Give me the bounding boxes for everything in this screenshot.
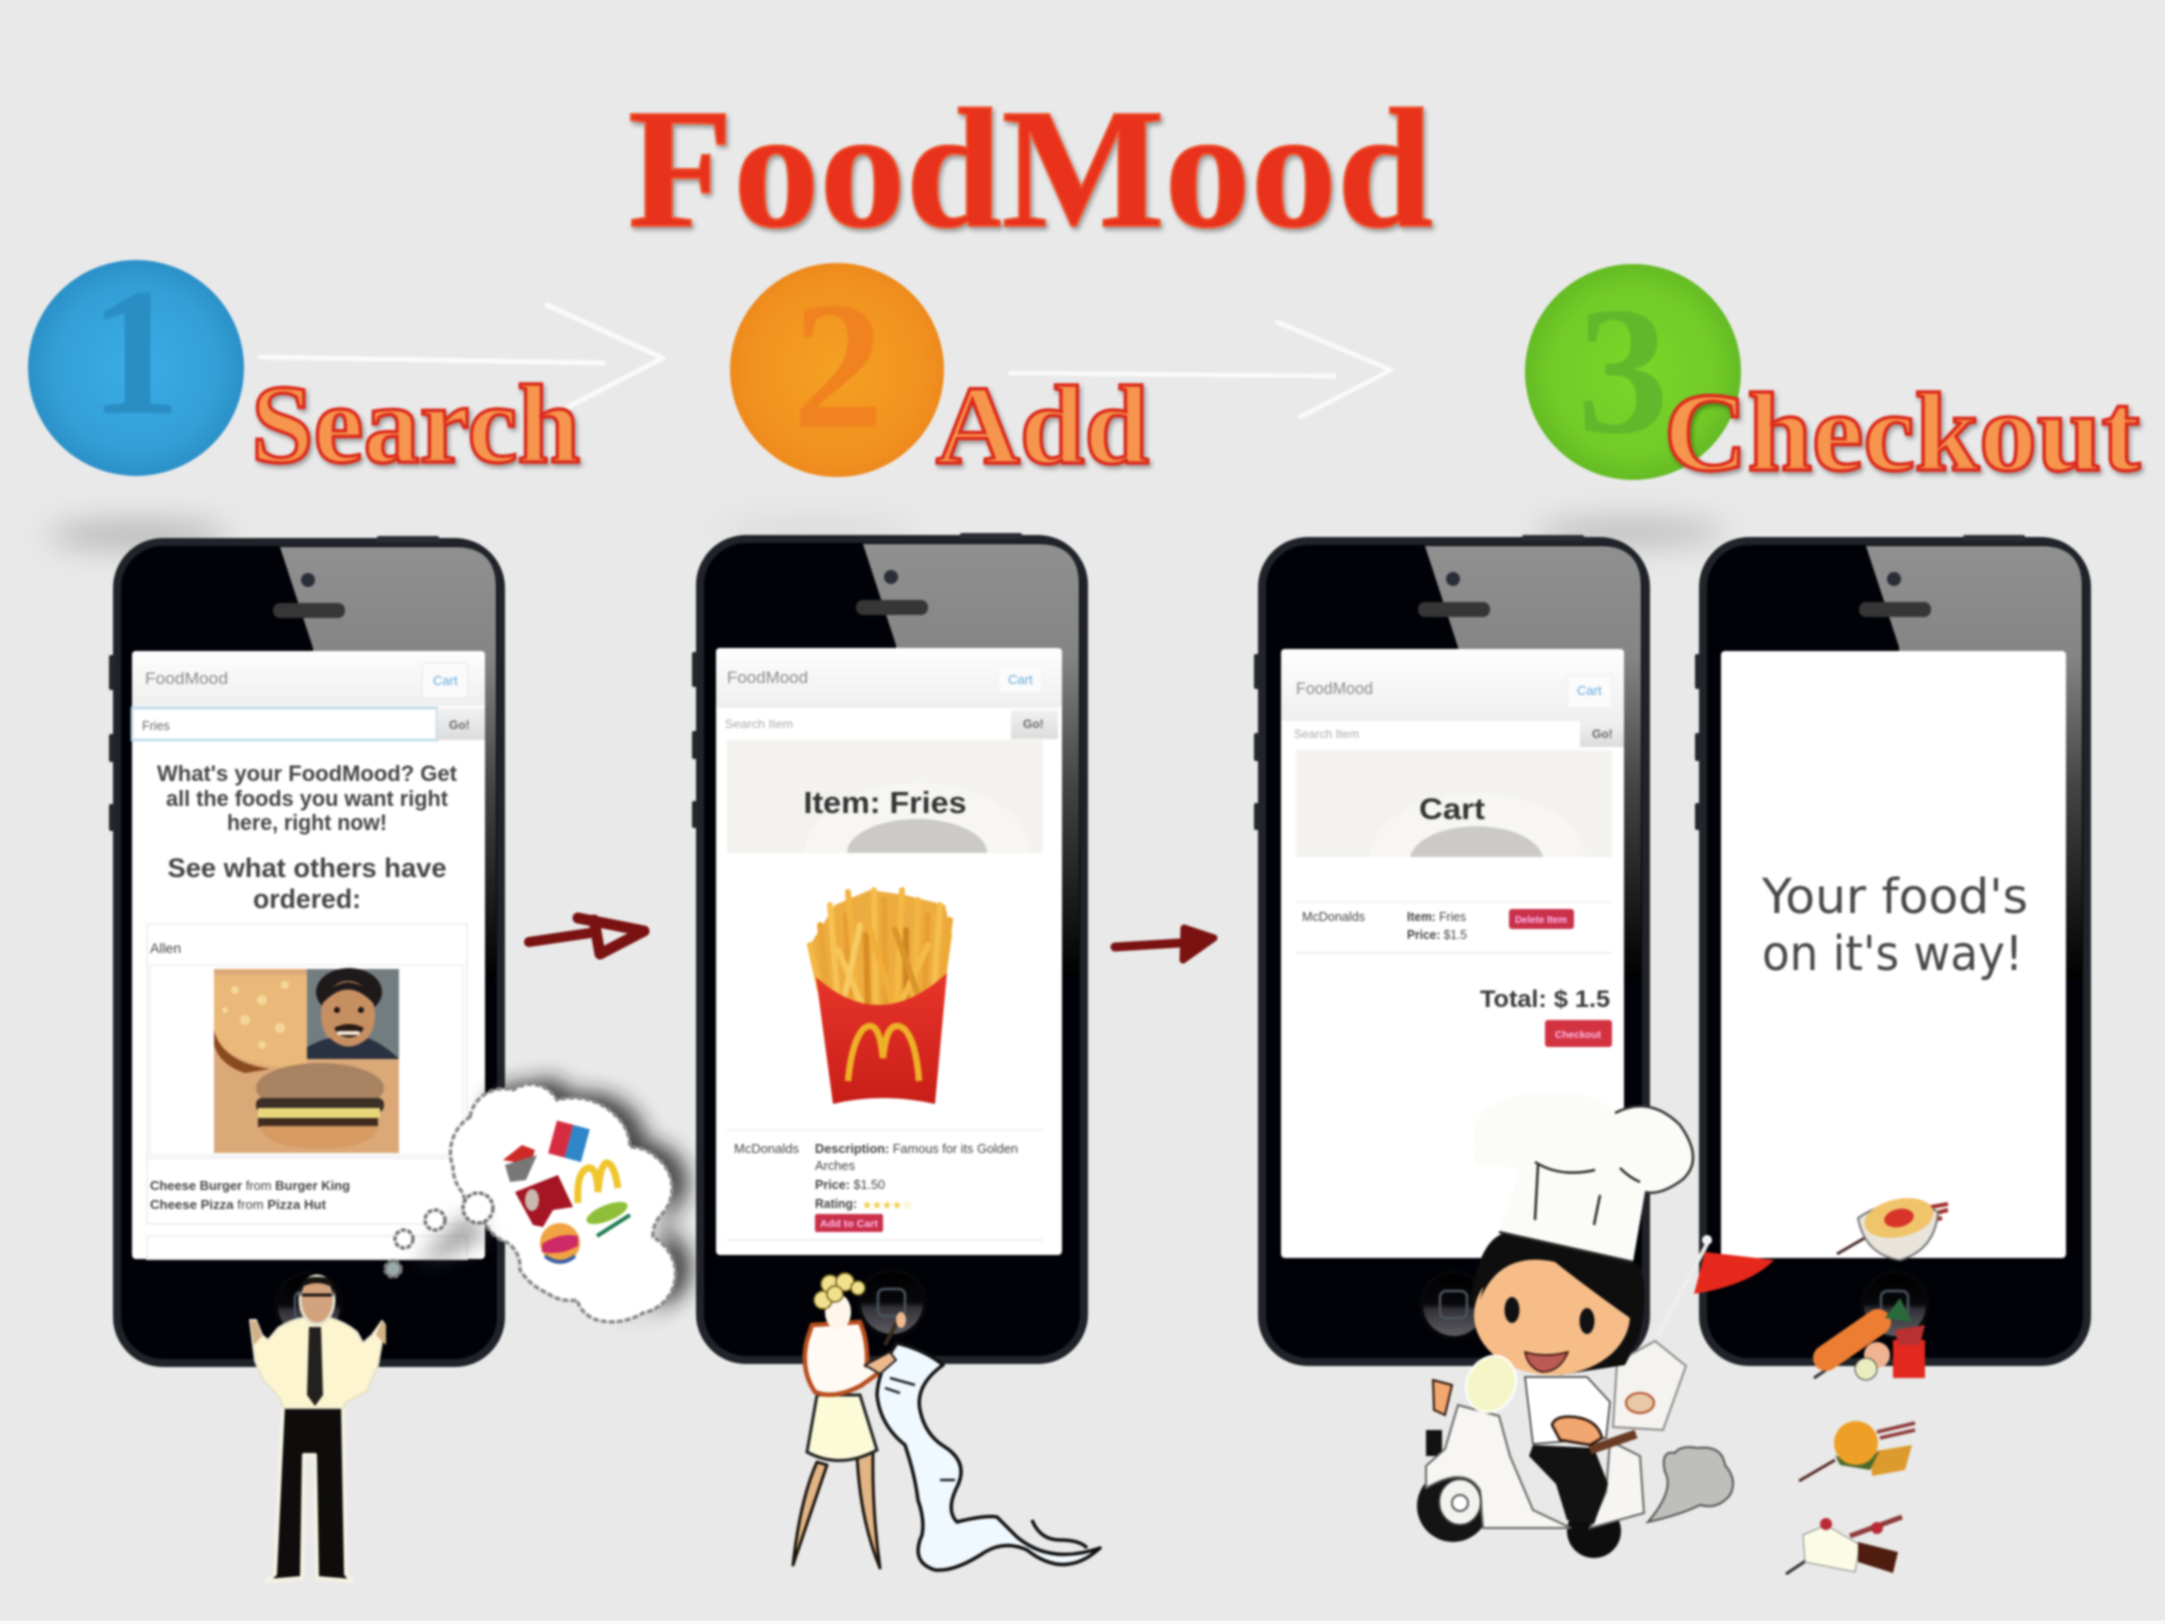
confirmation message: Your food's — [1761, 869, 2028, 925]
confirmation message: on it's way! — [1762, 926, 2023, 982]
thought bubble trail — [385, 1193, 493, 1277]
welcome heading: ordered: — [253, 884, 361, 914]
phone 1: search screen: Cart — [433, 673, 458, 688]
chef on delivery scooter — [1417, 1092, 1774, 1558]
cart row: Price: $1.5 — [1407, 928, 1467, 942]
phone 2: item screen: Search Item — [725, 717, 793, 731]
delivery flag — [1657, 1235, 1774, 1337]
phone 2: item screen: Description: Famous for its Golden — [815, 1142, 1018, 1156]
item banner — [727, 740, 1043, 853]
legs — [793, 1452, 880, 1568]
phone 4: confirmation screen — [1695, 535, 2091, 1366]
waitress holding long bill — [793, 1273, 1100, 1570]
step 3 badge — [1525, 264, 1741, 480]
thought bubble with restaurant logos — [385, 1078, 692, 1322]
title: FoodMood: FoodMood — [628, 74, 1433, 263]
white arrow 1 — [260, 305, 663, 407]
order card: Allen — [147, 924, 467, 1224]
cart row: Delete Item — [1515, 915, 1567, 926]
cart row — [1296, 902, 1612, 953]
phone 2: item screen: Cart — [1008, 672, 1033, 687]
order card: Allen: Cheese Pizza from Pizza Hut — [150, 1198, 327, 1212]
item banner: Item: Fries — [804, 785, 966, 820]
logo: McDonald's arches — [578, 1163, 618, 1203]
dress — [807, 1395, 877, 1461]
step 1 badge: 1 — [89, 250, 181, 453]
phone 2: item screen: FoodMood — [727, 668, 808, 687]
cart row: McDonalds — [1302, 910, 1365, 924]
welcome heading — [157, 761, 458, 914]
bottom edge strip — [0, 1621, 2165, 1624]
step label: Search: Search — [251, 363, 580, 487]
phone 3: cart screen — [1254, 535, 1650, 1366]
step label: Add: Add — [936, 364, 1149, 488]
scooter — [1417, 1405, 1644, 1558]
phone 2: item screen: McDonalds — [734, 1142, 799, 1156]
fries image — [810, 890, 952, 1104]
phone 2: item screen: Rating: — [815, 1197, 857, 1211]
food icon: vegetables — [1814, 1298, 1925, 1380]
rating stars: ★★★★☆ — [862, 1198, 912, 1212]
logo: Subway — [584, 1197, 630, 1236]
chef body — [1433, 1377, 1610, 1445]
food and face photo — [214, 968, 399, 1153]
head and hair — [825, 1294, 851, 1330]
red arrow 1 — [529, 918, 644, 954]
chef hat — [1473, 1092, 1693, 1262]
add to cart button — [815, 1214, 883, 1232]
food icon: burger and fries — [1799, 1421, 1915, 1481]
food delivery box — [1613, 1341, 1686, 1430]
step 3 badge: 3 — [1577, 269, 1669, 472]
phone 2: item screen — [692, 533, 1088, 1364]
phone 1: search screen: Fries — [142, 719, 170, 733]
phone 3: cart screen: FoodMood — [1296, 679, 1373, 698]
step 2 badge: 2 — [792, 264, 884, 467]
logo: Pizza Hut — [503, 1145, 537, 1182]
phone 2: item screen: Arches — [815, 1159, 855, 1173]
step 1 badge — [28, 250, 244, 476]
phone 1: search screen: Go! — [449, 718, 470, 732]
welcome heading: What's your FoodMood? Get — [157, 761, 458, 786]
welcome heading: all the foods you want right — [166, 786, 449, 811]
checkout button: Checkout — [1555, 1030, 1602, 1041]
step 2 badge — [730, 263, 944, 477]
white arrow 2 — [1010, 322, 1391, 417]
phone 3: cart screen: Cart — [1577, 683, 1602, 698]
logo: KFC — [515, 1175, 573, 1227]
phone 2: item screen: Price: $1.50 — [815, 1178, 885, 1192]
food icon: soup bowl — [1837, 1192, 1948, 1260]
arm with pencil — [865, 1352, 896, 1374]
food icon: cake — [1786, 1517, 1902, 1574]
phone 3: cart screen: Go! — [1592, 727, 1613, 741]
bill paper — [877, 1343, 1100, 1570]
total: Total: $ 1.5 — [1480, 986, 1610, 1013]
confirmation message — [1761, 869, 2028, 982]
add to cart button: Add to Cart — [820, 1219, 879, 1230]
phone 1: search screen — [109, 536, 505, 1367]
step label: Checkout: Checkout — [1664, 371, 2140, 495]
scooter mirror — [1457, 1348, 1525, 1420]
phone 2: item screen: Go! — [1023, 717, 1044, 731]
welcome heading: here, right now! — [227, 810, 387, 835]
phone 3: cart screen: Search Item — [1294, 727, 1359, 741]
red arrow 2 — [1115, 928, 1214, 960]
welcome heading: See what others have — [168, 853, 446, 883]
exhaust smoke — [1648, 1447, 1733, 1522]
cart banner — [1296, 750, 1612, 857]
cart banner: Cart — [1419, 793, 1485, 826]
man in white shirt and tie — [250, 1276, 386, 1581]
logo: Domino's — [548, 1120, 590, 1162]
order card: Allen: Cheese Burger from Burger King — [150, 1179, 350, 1193]
order card: Allen: Allen — [150, 940, 181, 956]
logo: Burger King — [540, 1223, 580, 1263]
shadows below step circles — [48, 518, 1725, 549]
chef head — [1470, 1233, 1645, 1375]
phone 1: search screen: FoodMood — [145, 669, 228, 688]
checkout button — [1545, 1020, 1612, 1047]
cart row: Item: Fries — [1407, 910, 1466, 924]
